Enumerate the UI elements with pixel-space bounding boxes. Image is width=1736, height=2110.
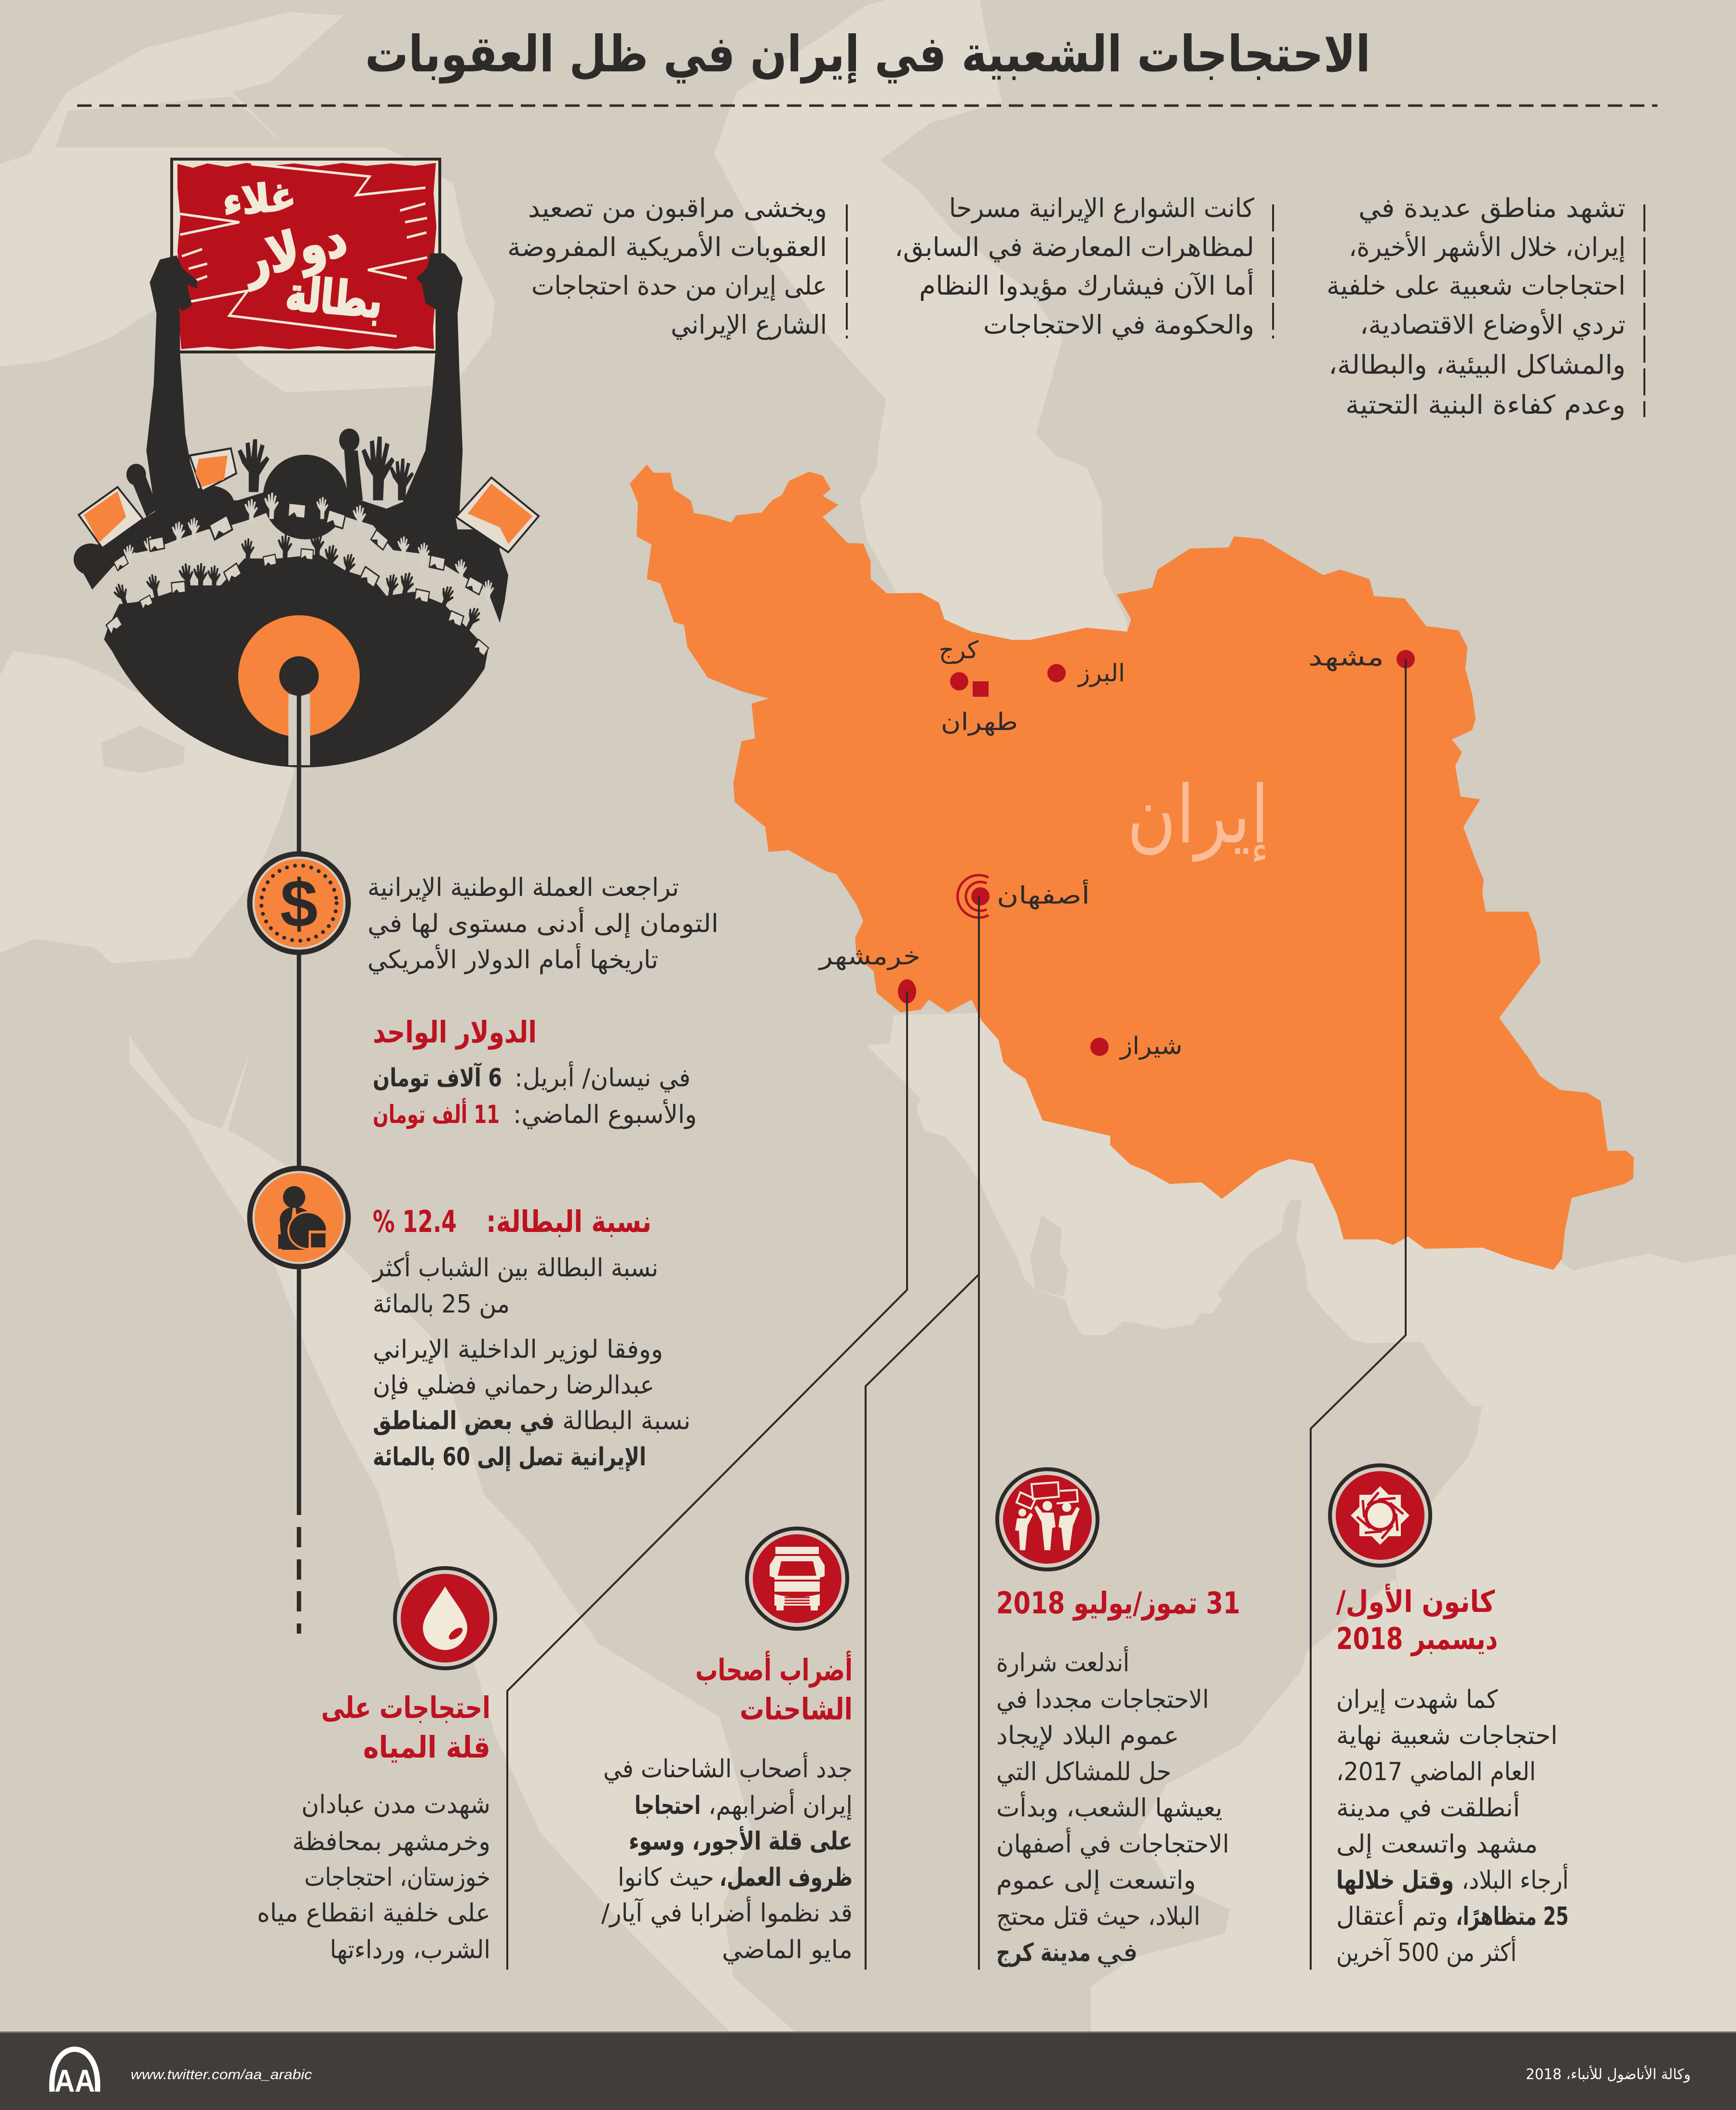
orange placards — [79, 487, 143, 548]
intro paragraph 1: والمشاكل البيئية، والبطالة، — [1329, 350, 1626, 380]
column: December 2018: كما شهدت إيران — [1336, 1685, 1498, 1714]
intro paragraph 2: كانت الشوارع الإيرانية مسرحا — [949, 193, 1254, 223]
slogan: prices: غلاء — [221, 174, 298, 225]
column: water protests: الشرب، ورداءتها — [330, 1935, 490, 1964]
column: truck drivers strike: على قلة الأجور، وسوء — [629, 1826, 853, 1856]
column: water protests — [257, 1690, 490, 1964]
column: December 2018: ديسمبر 2018 — [1336, 1621, 1498, 1656]
icon: protesters — [997, 1469, 1098, 1569]
column: truck drivers strike: الشاحنات — [740, 1691, 853, 1727]
placard with slogans — [172, 159, 440, 352]
intro paragraph 3: ويخشى مراقبون من تصعيد — [528, 193, 827, 223]
unemployment text — [371, 1204, 691, 1472]
column: July 2018: يعيشها الشعب، وبدأت — [996, 1791, 1222, 1823]
dollar exchange rate: 11 ألف تومان — [373, 1098, 500, 1129]
dome — [263, 455, 348, 540]
intro paragraph 1: تردي الأوضاع الاقتصادية، — [1360, 309, 1626, 340]
intro paragraph 3: الشارع الإيراني — [671, 310, 827, 340]
column: December 2018: أرجاء البلاد، — [1462, 1864, 1569, 1895]
intro paragraph 1: احتجاجات شعبية على خلفية — [1327, 271, 1626, 301]
icon: central bank — [1330, 1465, 1430, 1566]
unemployment text: نسبة البطالة: — [486, 1204, 651, 1239]
column: December 2018: أكثر من 500 آخرين — [1336, 1936, 1517, 1967]
city: Alborz — [1047, 659, 1125, 687]
unemployment text: ووفقا لوزير الداخلية الإيراني — [373, 1335, 663, 1364]
column: July 2018: 31 تموز/يوليو 2018 — [996, 1585, 1240, 1621]
column: truck drivers strike: جدد أصحاب الشاحنات في — [603, 1752, 853, 1784]
column: July 2018: البلاد، حيث قتل محتج — [996, 1902, 1200, 1931]
dollar exchange rate: 6 آلاف تومان — [373, 1062, 502, 1093]
column: water protests: وخرمشهر بمحافظة — [292, 1827, 490, 1856]
column: July 2018: الاحتجاجات مجددا في — [996, 1685, 1209, 1714]
column: truck drivers strike: مايو الماضي — [722, 1935, 853, 1964]
column: truck drivers strike — [601, 1650, 853, 1964]
city: Karaj — [939, 636, 978, 690]
intro paragraph 1: إيران، خلال الأشهر الأخيرة، — [1349, 231, 1626, 262]
intro paragraph 3 — [507, 193, 847, 340]
timeline — [297, 694, 301, 1634]
icon: unemployment — [250, 1168, 348, 1267]
icon: dollar coin: $ — [280, 866, 318, 941]
left arm — [146, 256, 238, 521]
big raised hands — [238, 439, 270, 492]
column: truck drivers strike: ظروف العمل، — [719, 1863, 853, 1892]
column: December 2018: 25 متظاهرًا، — [1456, 1902, 1569, 1931]
intro paragraph 3: العقوبات الأمريكية المفروضة — [507, 231, 827, 262]
city: Alborz: البرز — [1077, 659, 1125, 687]
leader lines — [507, 659, 1406, 1970]
city: Isfahan: أصفهان — [997, 879, 1090, 910]
column: December 2018: احتجاجات شعبية نهاية — [1336, 1721, 1558, 1750]
unemployment text: من 25 بالمائة — [373, 1290, 510, 1319]
column: July 2018: الاحتجاجات في أصفهان — [996, 1827, 1229, 1859]
protest illustration — [74, 159, 539, 767]
logo: Anadolu Agency — [52, 2049, 97, 2098]
title: الاحتجاجات الشعبية في إيران في ظل العقوبات — [365, 25, 1370, 84]
slogan decoration lines — [180, 164, 427, 337]
city: Khorramshahr — [818, 942, 921, 1003]
dollar exchange rate: والأسبوع الماضي: — [513, 1099, 697, 1129]
column: truck drivers strike: احتجاجا — [635, 1791, 701, 1820]
city: Shiraz — [1090, 1032, 1182, 1060]
column: December 2018: كانون الأول/ — [1336, 1583, 1495, 1619]
city: Tehran: طهران — [941, 708, 1018, 736]
column: July 2018 — [996, 1585, 1240, 1967]
unemployment text: نسبة البطالة — [562, 1407, 691, 1435]
text: currency decline: تراجعت العملة الوطنية الإيرانية — [367, 873, 679, 902]
intro paragraph 2: والحكومة في الاحتجاجات — [983, 310, 1254, 340]
city: Isfahan — [958, 875, 1090, 918]
intro paragraph 2: أما الآن فيشارك مؤيدوا النظام — [919, 269, 1254, 301]
intro paragraph 1: وعدم كفاءة البنية التحتية — [1345, 390, 1626, 420]
column: December 2018 — [1336, 1583, 1569, 1967]
city: Karaj: كرج — [939, 636, 978, 664]
right arm — [400, 253, 462, 517]
city: Khorramshahr: خرمشهر — [818, 942, 921, 971]
city: Shiraz: شيراز — [1119, 1032, 1182, 1060]
slogan: dollar: دولار — [235, 208, 353, 291]
dollar exchange rate — [373, 1014, 697, 1129]
column: truck drivers strike: إيران أضرابهم، — [708, 1789, 853, 1820]
column: water protests: احتجاجات على — [321, 1690, 490, 1725]
column: truck drivers strike: أضراب أصحاب — [695, 1650, 853, 1688]
icon: water drop — [395, 1568, 495, 1668]
column: December 2018: مشهد واتسعت إلى — [1336, 1830, 1538, 1859]
text: currency decline — [367, 873, 719, 974]
text: currency decline: تاريخها أمام الدولار الأمريكي — [367, 943, 658, 974]
column: December 2018: أنطلقت في مدينة — [1336, 1791, 1520, 1823]
column: December 2018: العام الماضي 2017، — [1336, 1758, 1536, 1786]
map of Iran — [630, 464, 1634, 1270]
unemployment text: 12.4 % — [373, 1204, 457, 1239]
column: July 2018: حل للمشاكل التي — [996, 1758, 1171, 1786]
orange ring and stem — [238, 615, 360, 765]
column: water protests: خوزستان، احتجاجات — [304, 1863, 490, 1892]
intro paragraph 1: تشهد مناطق عديدة في — [1358, 193, 1626, 224]
unemployment text: الإيرانية تصل إلى 60 بالمائة — [373, 1443, 646, 1472]
upper crowd band — [74, 492, 508, 623]
column: December 2018: وقتل خلالها — [1336, 1866, 1454, 1895]
text: currency decline: التومان إلى أدنى مستوى لها في — [367, 907, 719, 938]
column: truck drivers strike: حيث كانوا — [618, 1863, 714, 1892]
column: December 2018: وتم أعتقال — [1336, 1900, 1448, 1931]
footer credit: وكالة الأناضول للأنباء، 2018 — [1526, 2065, 1691, 2083]
dollar exchange rate: الدولار الواحد — [373, 1014, 537, 1050]
label: Iran: إيران — [1127, 769, 1269, 862]
city: Mashhad: مشهد — [1308, 643, 1384, 672]
column: water protests: على خلفية انقطاع مياه — [257, 1899, 490, 1928]
crowd — [74, 253, 539, 767]
column: truck drivers strike: قد نظموا أضرابا في آيار/ — [601, 1896, 853, 1928]
logo: Anadolu Agency: AA — [54, 2063, 95, 2098]
column: water protests: شهدت مدن عبادان — [301, 1790, 490, 1819]
intro paragraph 2: لمظاهرات المعارضة في السابق، — [895, 232, 1254, 263]
column: July 2018: أندلعت شرارة — [996, 1646, 1129, 1677]
intro paragraph 3: على إيران من حدة احتجاجات — [531, 271, 827, 301]
column: July 2018: عموم البلاد لإيجاد — [996, 1721, 1179, 1750]
city: Mashhad — [1308, 643, 1415, 672]
dollar exchange rate: في نيسان/ أبريل: — [515, 1061, 691, 1093]
column: water protests: قلة المياه — [363, 1730, 490, 1765]
icon: truck — [747, 1528, 847, 1629]
intro paragraph 1 — [1327, 193, 1644, 420]
slogan: unemployment: بطالة — [284, 267, 384, 329]
icon: dollar coin — [250, 854, 348, 952]
unemployment text: عبدالرضا رحماني فضلي فإن — [373, 1371, 654, 1400]
city: Tehran — [941, 681, 1018, 736]
footer link: www.twitter.com/aa_arabic — [131, 2067, 312, 2083]
column: July 2018: مدينة كرج — [996, 1938, 1091, 1967]
beige hands in band — [123, 493, 494, 602]
lower crowd fan — [104, 555, 488, 767]
column: July 2018: في — [1096, 1938, 1138, 1967]
intro paragraph 2 — [895, 193, 1273, 340]
unemployment text: في بعض المناطق — [373, 1407, 555, 1435]
Iran shape — [630, 464, 1634, 1270]
footer — [0, 2031, 1736, 2110]
unemployment text: نسبة البطالة بين الشباب أكثر — [371, 1251, 658, 1283]
column: July 2018: واتسعت إلى عموم — [996, 1866, 1196, 1895]
